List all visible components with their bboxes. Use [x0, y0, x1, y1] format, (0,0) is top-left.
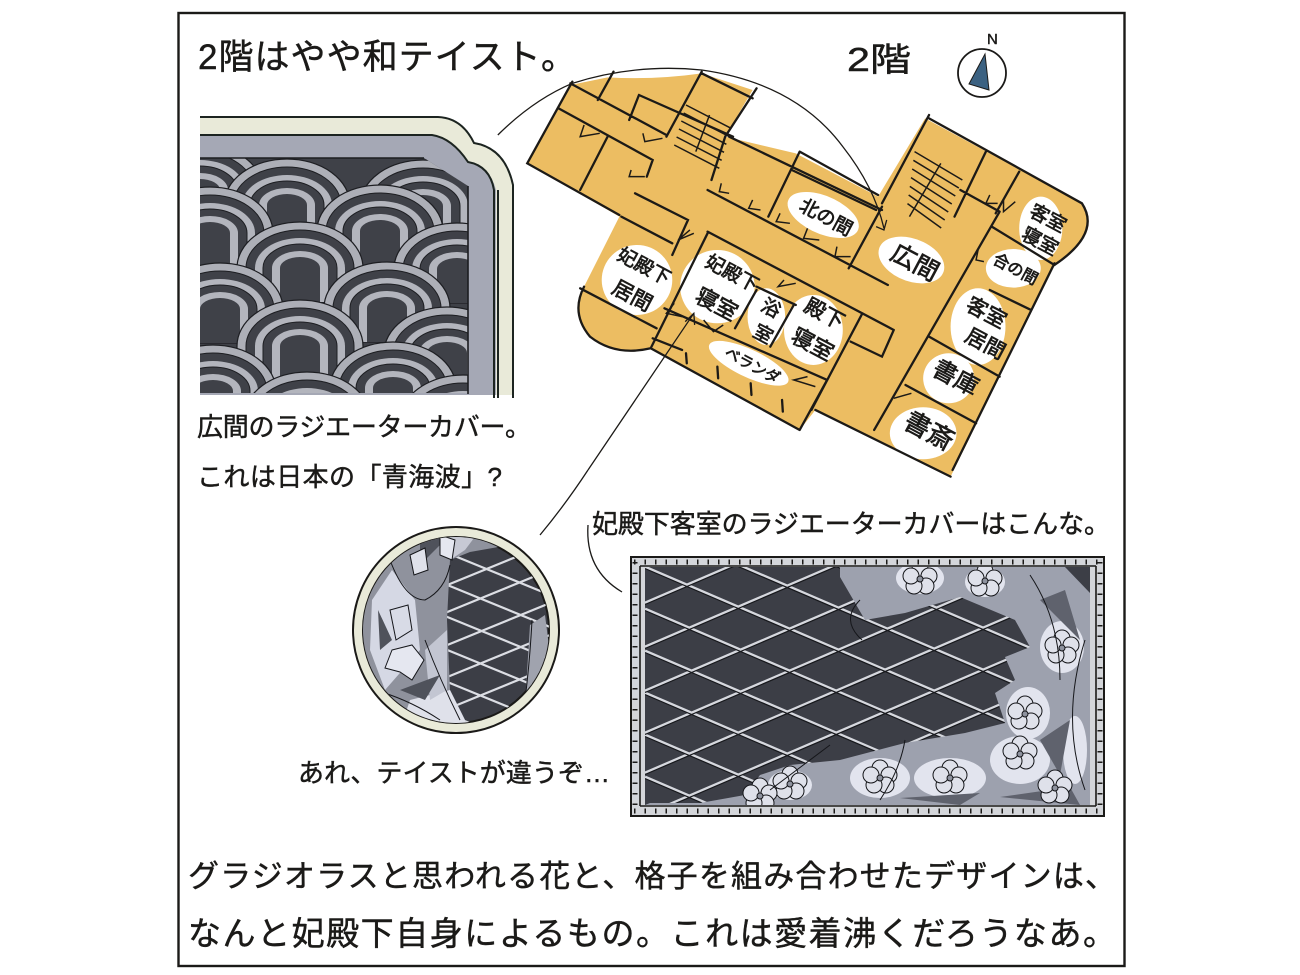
- floor plan: [498, 68, 1088, 477]
- room labels backing: [602, 182, 1062, 459]
- door swings: [580, 125, 1015, 398]
- page frame: [178, 13, 1124, 966]
- room labels: 客室: [1026, 200, 1070, 237]
- room labels: 広間: [886, 239, 943, 287]
- bottom text: グラジオラスと思われる花と、格子を組み合わせたデザインは、: [188, 859, 1116, 894]
- panel: rectangular radiator cover: [630, 556, 1105, 817]
- bottom text: [188, 859, 1116, 952]
- hatched frame: [640, 566, 1096, 806]
- lattice: [645, 567, 1030, 803]
- lattice: [447, 556, 549, 722]
- flowers: [363, 537, 498, 723]
- arrows: [498, 68, 887, 470]
- caption: seigaiha: 広間のラジエーターカバー。: [197, 412, 531, 442]
- room labels: 書斎: [899, 406, 959, 457]
- panel: seigaiha radiator cover: [200, 116, 514, 398]
- cover frame: [200, 117, 513, 395]
- caption: seigaiha: [197, 412, 531, 492]
- stairs: [674, 105, 962, 228]
- icon: compass: [958, 31, 1006, 97]
- room labels: 寝室: [1018, 223, 1062, 260]
- panel: round radiator cover: [352, 526, 560, 734]
- room labels: 浴: [757, 295, 784, 323]
- floor label: 2階: [847, 41, 911, 78]
- room labels: 居間: [961, 324, 1009, 364]
- caption: taste differs: あれ、テイストが違うぞ…: [298, 758, 610, 788]
- room labels: 寝室: [787, 323, 838, 366]
- caption: princess room cover: 妃殿下客室のラジエーターカバーはこんな。: [592, 509, 1110, 539]
- room labels: 殿下: [800, 294, 848, 334]
- room labels: 書庫: [928, 355, 983, 402]
- room labels: 室: [749, 321, 776, 349]
- walls: [527, 72, 1088, 477]
- room labels: 客室: [962, 293, 1010, 333]
- building fill: [498, 68, 1088, 477]
- title: 2階はやや和テイスト。: [198, 38, 576, 77]
- room labels: [608, 195, 1070, 457]
- icon: compass: N: [987, 31, 998, 48]
- room labels: 妃殿下: [613, 244, 674, 290]
- arrow: to rectangular cover: [588, 525, 622, 592]
- room labels: 妃殿下: [701, 251, 762, 297]
- caption: seigaiha: これは日本の「青海波」?: [197, 462, 502, 492]
- bottom text: なんと妃殿下自身によるもの。これは愛着沸くだろうなあ。: [188, 915, 1116, 952]
- flowers area: [645, 567, 1090, 805]
- room labels: 寝室: [691, 283, 742, 326]
- arrow: to round cover: [540, 470, 588, 535]
- room labels: ベランダ: [722, 344, 783, 388]
- room labels: 居間: [608, 276, 656, 316]
- wave pattern: [200, 158, 468, 393]
- room labels: 合の間: [990, 250, 1041, 289]
- room labels: 北の間: [795, 195, 856, 241]
